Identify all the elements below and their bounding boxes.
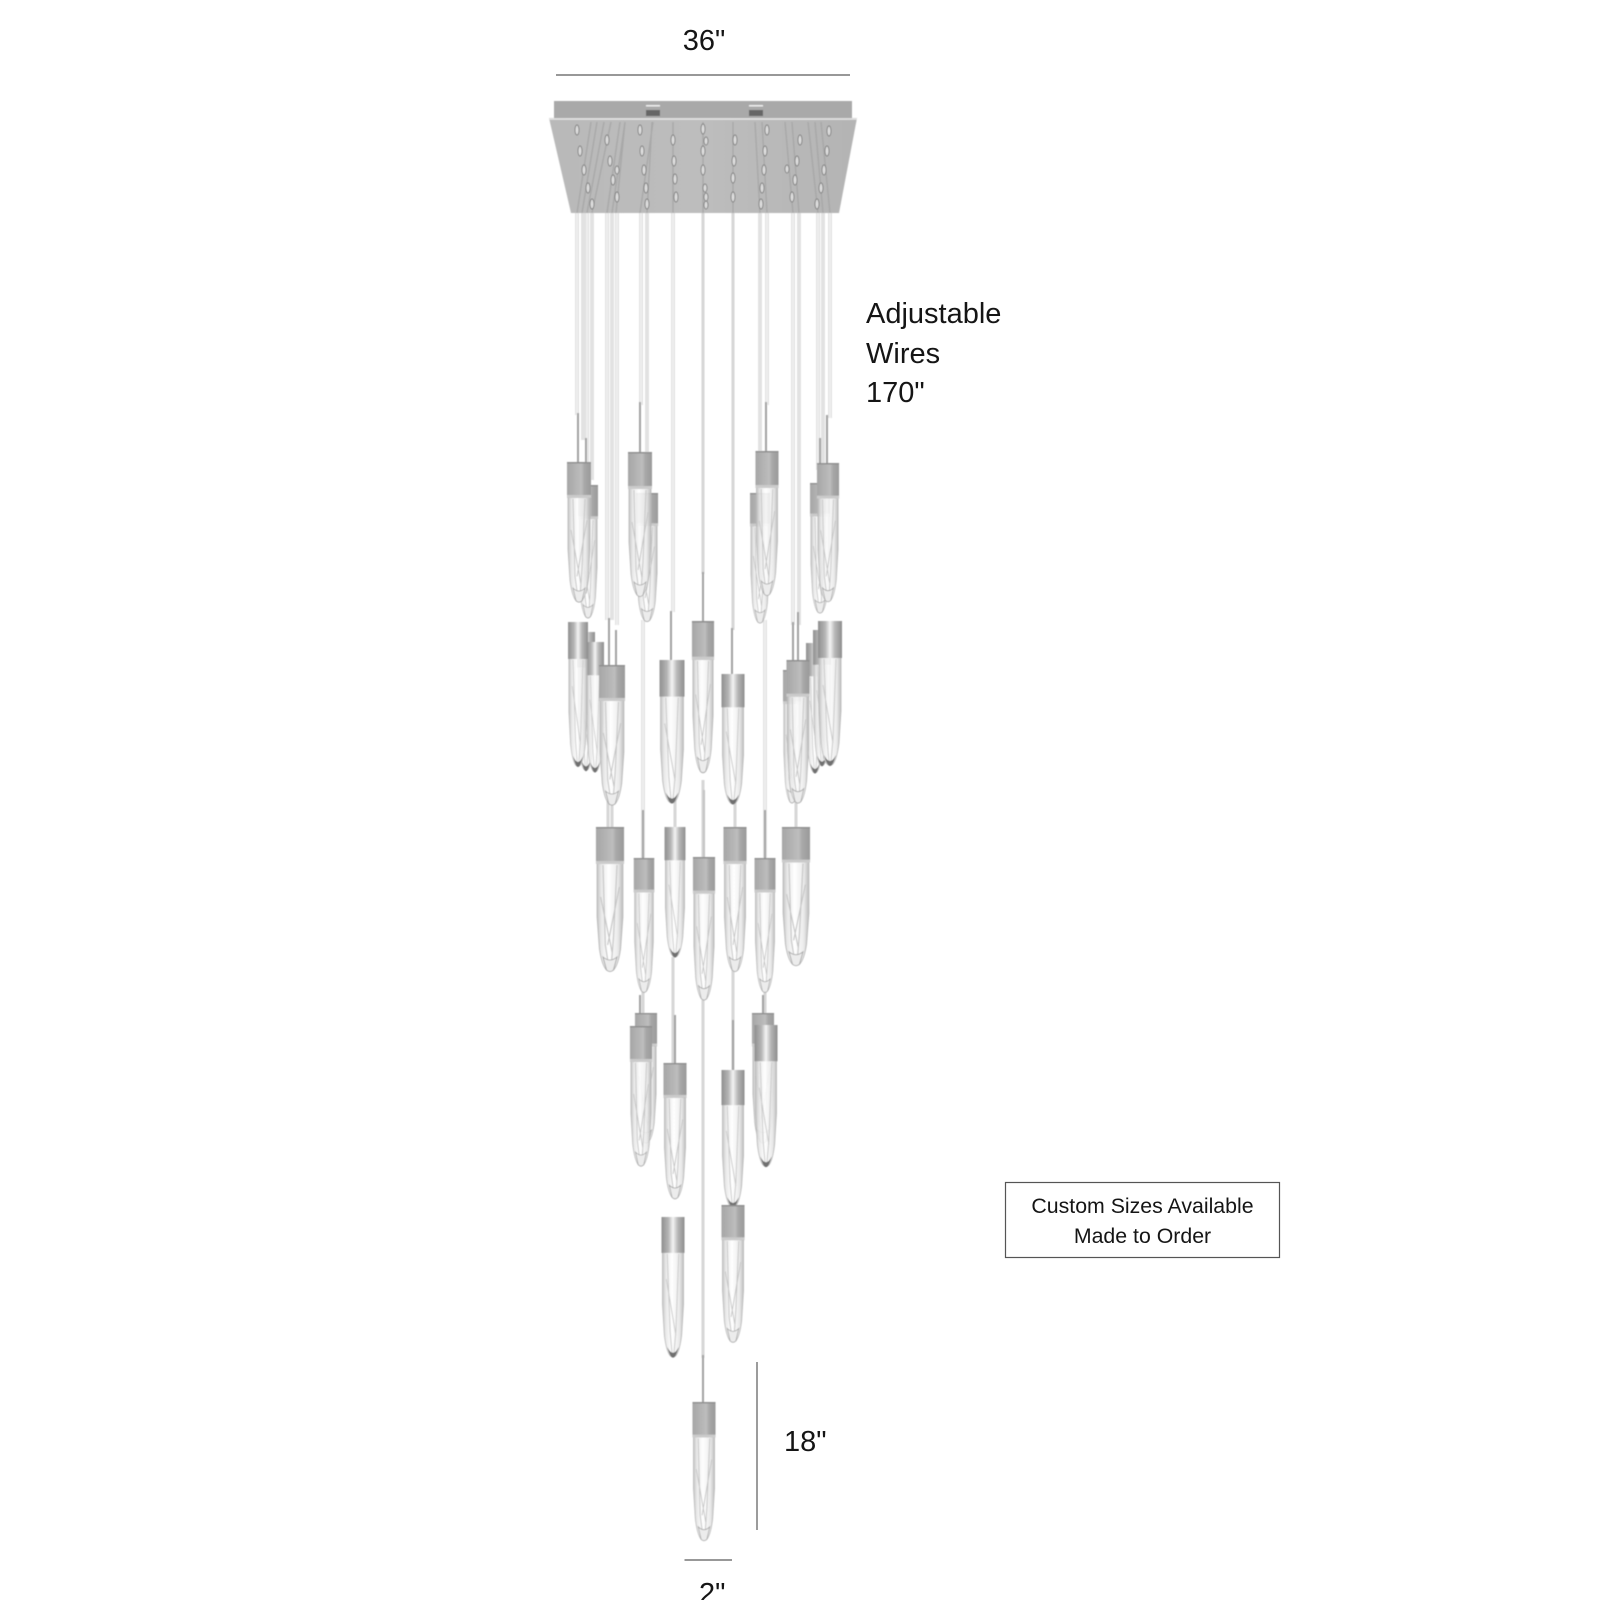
callout: custom sizes: Custom Sizes Available [1031, 1194, 1254, 1218]
suspension wires [577, 213, 830, 1358]
pendant back [577, 632, 595, 771]
text: adjustable wires [866, 298, 1001, 409]
row 2 pendants [568, 621, 842, 805]
row 3 pendants [596, 827, 810, 1000]
pendant [660, 660, 684, 804]
wires on plate [577, 122, 830, 213]
pendant front inner right [755, 451, 779, 596]
pendant [786, 660, 810, 803]
pendant [818, 621, 842, 766]
pendant back left [578, 485, 598, 618]
row 4 pendants [630, 1013, 778, 1208]
width line [556, 74, 850, 76]
row 5 pendants [661, 1205, 745, 1358]
pendant [661, 1217, 685, 1358]
pendant back [635, 1013, 657, 1143]
callout: custom sizes: Made to Order [1074, 1224, 1211, 1248]
pendant [721, 674, 745, 804]
pendant [782, 827, 810, 966]
pendant [721, 1205, 745, 1342]
pendant back inner right [750, 493, 770, 623]
pendant stems [578, 402, 827, 1402]
pendant back [806, 643, 824, 774]
label: 36 inches: 36" [683, 25, 725, 57]
pendant [599, 665, 625, 805]
text: adjustable wires: Wires [866, 338, 940, 370]
canopy holes [575, 124, 831, 209]
text: adjustable wires: Adjustable [866, 298, 1001, 330]
text: adjustable wires: 170" [866, 377, 925, 409]
pendant [721, 1070, 745, 1208]
label: 18 inches: 18" [784, 1426, 827, 1458]
callout: custom sizes [1006, 1182, 1280, 1258]
canopy vents [646, 105, 763, 116]
bottom pendant [692, 1402, 716, 1541]
pendant [634, 858, 654, 992]
pendant back [813, 630, 831, 766]
pendant front inner left [628, 452, 652, 596]
chandelier [549, 101, 857, 1541]
pendant back [586, 642, 604, 772]
diameter line [684, 1559, 732, 1561]
pendant back inner left [636, 493, 658, 622]
diameter dimension [684, 1560, 732, 1600]
pendant [630, 1026, 652, 1166]
wire highlights [577, 213, 830, 860]
canopy back strip [554, 101, 852, 119]
pendant [665, 827, 685, 958]
pendant front left [567, 462, 591, 602]
pendant [693, 857, 715, 1000]
pendant [754, 1025, 778, 1167]
row 1 pendants [567, 451, 839, 623]
pendant back right [810, 483, 830, 613]
pendant [596, 827, 624, 972]
pendant front right [817, 463, 839, 602]
canopy plate [549, 118, 857, 213]
pendant [755, 858, 775, 992]
pendant back [752, 1013, 774, 1143]
pendant back [783, 670, 801, 803]
pendant [723, 827, 747, 972]
height line [756, 1362, 758, 1530]
pendant [692, 621, 714, 773]
pendant [663, 1063, 687, 1199]
pendant [568, 622, 588, 767]
canopy [549, 101, 857, 213]
